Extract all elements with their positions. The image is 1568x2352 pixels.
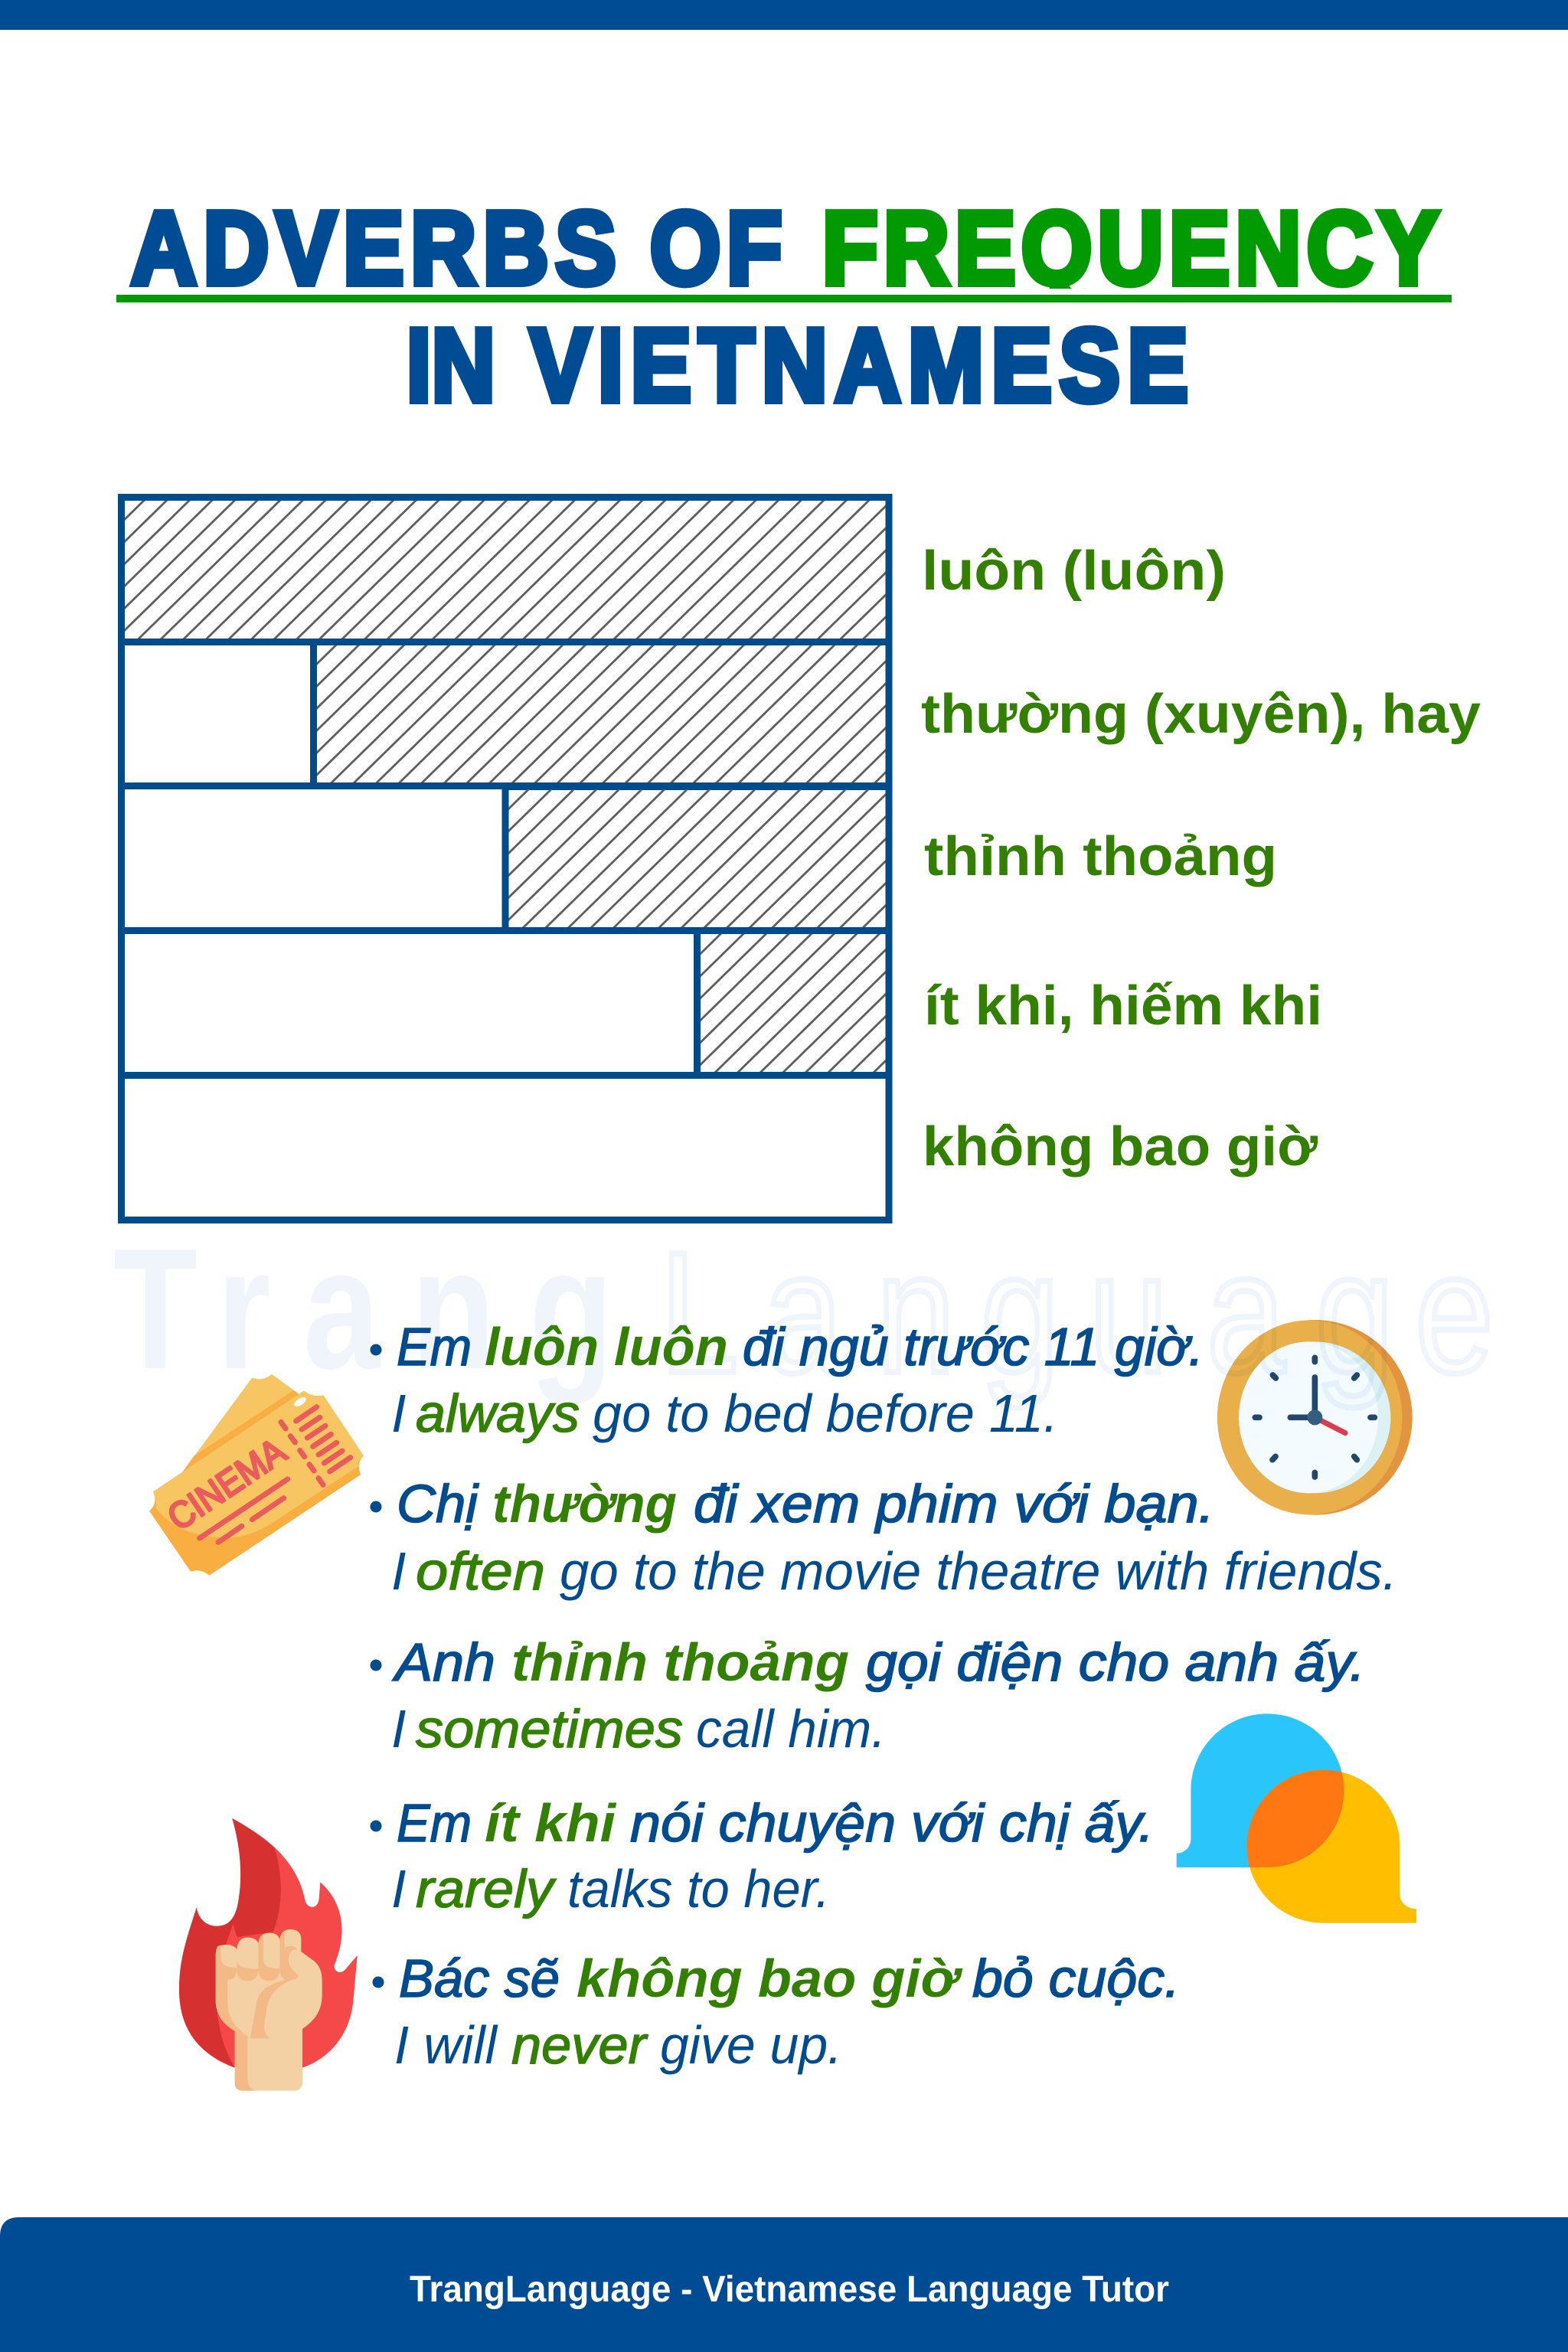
row: always [121, 498, 889, 642]
footer [0, 2217, 1568, 2352]
label: không bao giờ: không bao giờ [923, 1116, 1318, 1178]
title line one: OF [650, 190, 782, 305]
sentence 5 [372, 1949, 1180, 2075]
watermark: Language [660, 1217, 1494, 1409]
sentence 1: đi ngủ trước 11 giờ. [743, 1317, 1204, 1377]
sentence 2: đi xem phim với bạn. [694, 1474, 1214, 1534]
row: often [121, 642, 889, 787]
sentence 2: often [416, 1541, 545, 1601]
icon: fist and flame [179, 1818, 358, 2091]
title underline [116, 295, 1452, 302]
watermark: Trang [113, 1214, 613, 1406]
sentence 1: always [416, 1383, 580, 1443]
watermark [113, 1214, 1494, 1409]
label: ít khi, hiếm khi: ít khi, hiếm khi [924, 975, 1322, 1037]
sentence 4: ít khi [485, 1793, 617, 1853]
sentence 1: go to bed before 11. [593, 1383, 1058, 1443]
title line two: IN [407, 308, 495, 423]
sentence 3: call him. [696, 1699, 886, 1759]
sentence 4: talks to her. [567, 1859, 830, 1919]
label: luôn (luôn): luôn (luôn) [922, 541, 1226, 602]
title line one: FREQUENCY [822, 190, 1439, 305]
sentence 3: thỉnh thoảng [511, 1632, 849, 1692]
sentence 2: I [391, 1541, 406, 1601]
row: sometimes [121, 786, 889, 931]
footer text: TrangLanguage - Vietnamese Language Tutor [410, 2269, 1169, 2310]
example sentences [371, 1317, 1397, 2075]
sentence 4: Em [397, 1793, 472, 1853]
frequency chart [121, 498, 889, 1220]
sentence 4: nói chuyện với chị ấy. [630, 1793, 1154, 1853]
chart labels [921, 541, 1481, 1178]
label: thỉnh thoảng: thỉnh thoảng [924, 826, 1277, 887]
title line one: ADVERBS [131, 190, 616, 305]
icon: cinema ticket [149, 1374, 364, 1576]
sentence 2: thường [492, 1474, 677, 1534]
sentence 1: Em [397, 1317, 472, 1377]
title [116, 190, 1452, 423]
sentence 3: sometimes [416, 1699, 683, 1759]
sentence 4 [371, 1793, 1154, 1919]
sentence 4: rarely [416, 1859, 557, 1919]
sentence 5: không bao giờ [577, 1949, 963, 2008]
title line one [129, 208, 1442, 289]
sentence 3 [371, 1632, 1365, 1759]
sentence 4: I [391, 1859, 406, 1919]
sentence 2: Chị [397, 1474, 479, 1534]
sentence 3: I [391, 1699, 406, 1759]
sentence 3: Anh [392, 1632, 495, 1692]
icon: chat bubbles [1177, 1713, 1416, 1923]
sentence 1 [371, 1317, 1204, 1443]
top bar [0, 0, 1568, 30]
icon: clock [1217, 1320, 1413, 1515]
sentence 5: never [511, 2015, 648, 2075]
sentence 2: go to the movie theatre with friends. [560, 1541, 1397, 1601]
sentence 5: I will [394, 2015, 498, 2075]
sentence 5: bỏ cuộc. [972, 1949, 1180, 2008]
sentence 3: gọi điện cho anh ấy. [866, 1632, 1365, 1692]
sentence 1: luôn luôn [485, 1317, 728, 1377]
sentence 2 [371, 1474, 1397, 1601]
sentence 5: Bác sẽ [399, 1949, 560, 2008]
label: thường (xuyên), hay: thường (xuyên), hay [921, 684, 1481, 745]
row: rarely [121, 931, 889, 1075]
title line two: VIETNAMESE [530, 307, 1188, 423]
row: never [121, 1075, 889, 1220]
sentence 1: I [391, 1383, 406, 1443]
icon: cinema ticket: CINEMA [160, 1430, 294, 1539]
sentence 5: give up. [660, 2015, 842, 2075]
